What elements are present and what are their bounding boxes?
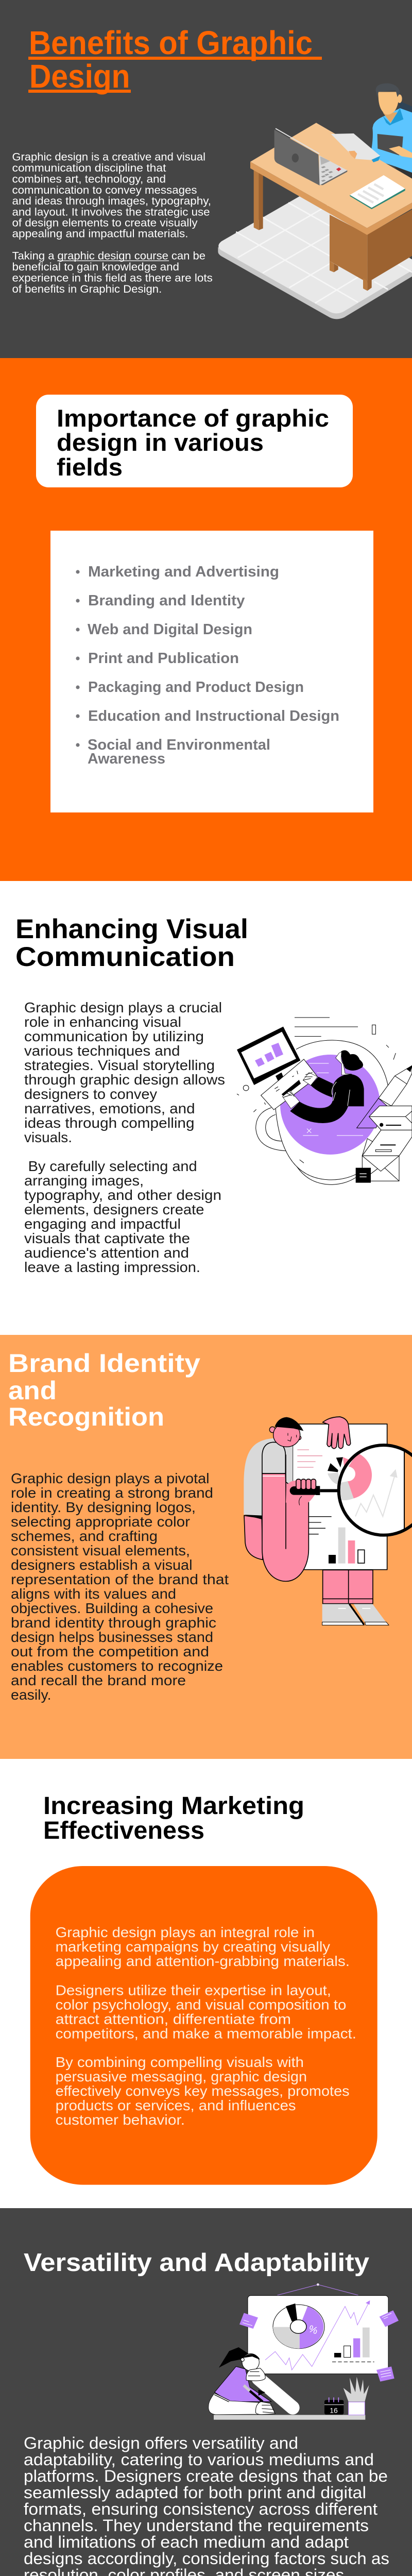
text block: intro definition: appealing and impactful materials.	[12, 228, 188, 240]
callout: marketing text card: persuasive messaging, graphic design	[56, 2069, 307, 2084]
text block: brand paragraph: aligns with its values and	[11, 1586, 176, 1602]
text block: brand paragraph: enables customers to recognize	[11, 1658, 223, 1674]
heading: Recognition	[8, 1402, 164, 1431]
text block: versatility paragraph one: seamlessly adapted for both print and digital	[24, 2483, 366, 2502]
text block: brand paragraph: representation of the brand that	[11, 1571, 229, 1587]
panel: versatility and adaptability	[0, 2208, 412, 2576]
panel: importance of graphic design	[0, 358, 412, 881]
list card: fields	[50, 531, 373, 812]
heading: Effectiveness	[43, 1817, 204, 1844]
text block: brand paragraph: designers establish a visual	[11, 1557, 193, 1573]
text block: brand paragraph: Graphic design plays a pivotal	[11, 1470, 210, 1486]
text block: brand paragraph: consistent visual elements,	[11, 1543, 190, 1558]
text block: intro definition: of design elements to create visually	[12, 217, 198, 229]
heading	[43, 1792, 304, 1844]
heading card: design in various	[57, 429, 264, 456]
text block: versatility paragraph one: adaptability, catering to various mediums and	[24, 2450, 374, 2469]
heading	[8, 1349, 200, 1431]
text block: course note: of benefits in Graphic Design.	[12, 283, 162, 295]
callout: marketing text card: competitors, and make a memorable impact.	[56, 2026, 356, 2042]
title	[28, 24, 322, 95]
icon: man with magnifying glass and report	[244, 1417, 412, 1625]
list card: fields: Marketing and Advertising	[88, 564, 279, 580]
text block: brand paragraph: objectives. Building a cohesive	[11, 1600, 213, 1616]
text block: visual paragraph two: engaging and impactful	[24, 1216, 181, 1232]
text block: visual paragraph one: ideas through compelling	[24, 1115, 195, 1131]
list card: fields: Web and Digital Design	[88, 621, 252, 638]
text block: visual paragraph two	[24, 1158, 221, 1275]
heading: Brand Identity	[8, 1349, 200, 1378]
panel: introduction	[0, 0, 412, 358]
heading card	[36, 395, 353, 487]
callout: marketing text card: products or services, and influences	[56, 2097, 296, 2113]
list card: fields: Print and Publication	[88, 650, 239, 667]
callout: marketing text card: color psychology, and visual composition to	[56, 1997, 346, 2013]
list card: fields: Education and Instructional Design	[88, 708, 339, 724]
text block: versatility paragraph one: formats, ensuring consistency across different	[24, 2500, 377, 2518]
text block: visual paragraph one	[24, 999, 225, 1145]
text block: brand paragraph: design helps businesses stand	[11, 1629, 213, 1645]
text block: visual paragraph one: communication by utilizing	[24, 1028, 204, 1044]
text block: intro definition: and layout. It involves the strategic use	[12, 206, 210, 218]
text block: brand paragraph	[11, 1470, 229, 1703]
panel: increasing marketing effectiveness	[0, 1759, 412, 2208]
list card: fields: Awareness	[88, 751, 165, 767]
list card: fields: Packaging and Product Design	[88, 679, 304, 696]
text block: versatility paragraph one: designs accordingly, considering factors such as	[24, 2549, 389, 2568]
text block: intro definition: communication to convey messages	[12, 184, 197, 196]
text block: visual paragraph two: By carefully selecting and	[28, 1158, 197, 1174]
title: Design	[29, 58, 130, 95]
text block: visual paragraph two: arranging images,	[24, 1173, 144, 1189]
text block: visual paragraph two: leave a lasting impression.	[24, 1259, 200, 1275]
text block: versatility paragraph one	[24, 2434, 389, 2576]
text block: versatility paragraph one: platforms. Designers create designs that can be	[24, 2467, 388, 2485]
text block: visual paragraph one: role in enhancing visual	[24, 1014, 181, 1030]
text block: brand paragraph: brand identity through graphic	[11, 1615, 216, 1631]
text block: brand paragraph: role in creating a strong brand	[11, 1485, 213, 1501]
heading: Increasing Marketing	[43, 1792, 304, 1820]
text block: visual paragraph one: Graphic design plays a crucial	[24, 999, 222, 1015]
text block: visual paragraph one: visuals.	[24, 1129, 72, 1145]
heading: Communication	[15, 942, 235, 972]
text block: brand paragraph: selecting appropriate color	[11, 1514, 190, 1530]
text block: brand paragraph: and recall the brand more	[11, 1672, 186, 1688]
text block: visual paragraph one: strategies. Visual storytelling	[24, 1057, 215, 1073]
text block: course note: Taking a graphic design course can be	[12, 250, 205, 262]
text block: brand paragraph: identity. By designing logos,	[11, 1499, 196, 1515]
text block: brand paragraph: easily.	[11, 1687, 52, 1703]
text block: intro definition: communication discipline that	[12, 162, 166, 174]
callout: marketing text card: marketing campaigns by creating visually	[56, 1939, 330, 1955]
text block: brand paragraph: schemes, and crafting	[11, 1528, 158, 1544]
text block: visual paragraph one: narratives, emotions, and	[24, 1100, 195, 1116]
callout: marketing text card: By combining compelling visuals with	[56, 2054, 304, 2070]
text block: visual paragraph two: typography, and other design	[24, 1187, 221, 1203]
callout: marketing text card: Designers utilize their expertise in layout,	[56, 1982, 331, 1998]
text block: visual paragraph two: elements, designers create	[24, 1201, 204, 1217]
text block: visual paragraph one: various techniques and	[24, 1043, 180, 1059]
panel: enhancing visual communication	[0, 881, 412, 1335]
text block: versatility paragraph one: channels. They understand the requirements	[24, 2516, 369, 2535]
callout: marketing text card: appealing and attention-grabbing materials.	[56, 1953, 350, 1969]
text block: intro definition: Graphic design is a creative and visual	[12, 151, 205, 163]
callout: marketing text card: Graphic design plays an integral role in	[56, 1924, 315, 1940]
heading card: fields	[57, 453, 123, 481]
title: Benefits of Graphic	[29, 24, 313, 61]
text block: brand paragraph: out from the competition and	[11, 1643, 209, 1659]
panel: brand identity and recognition	[0, 1335, 412, 1759]
heading: Enhancing Visual	[15, 914, 248, 944]
text block: intro definition	[12, 151, 211, 240]
heading: Versatility and Adaptability	[24, 2249, 369, 2277]
text block: visual paragraph one: designers to convey	[24, 1086, 157, 1102]
text block: visual paragraph two: audience's attention and	[24, 1245, 189, 1261]
heading	[15, 914, 248, 972]
text block: intro definition: combines art, technology, and	[12, 173, 166, 185]
text block: visual paragraph two: visuals that captivate the	[24, 1230, 190, 1246]
icon: woman studying analytics board	[209, 2283, 399, 2420]
callout: marketing text card	[30, 1866, 377, 2185]
text block: intro definition: and ideas through images, typography,	[12, 195, 211, 207]
text block: versatility paragraph one: Graphic design offers versatility and	[24, 2434, 298, 2452]
text block: course note	[12, 250, 213, 295]
text block: visual paragraph one: through graphic design allows	[24, 1072, 225, 1088]
callout: marketing text card: attract attention, differentiate from	[56, 2011, 291, 2027]
callout: marketing text card: effectively conveys key messages, promotes	[56, 2083, 350, 2099]
icon: woman working in a coffee cup	[237, 1018, 412, 1184]
heading card: Importance of graphic	[57, 404, 329, 432]
list card: fields: Branding and Identity	[88, 592, 245, 609]
icon: woman studying analytics board: %	[307, 2324, 319, 2337]
text block: versatility paragraph one: and limitations of each medium and adapt	[24, 2533, 349, 2551]
heading: and	[8, 1376, 57, 1405]
icon: designer at isometric desk	[218, 83, 412, 319]
icon: woman studying analytics board: 16	[330, 2406, 338, 2414]
text block: course note: experience in this field as there are lots	[12, 272, 213, 284]
list card: fields: Social and Environmental	[88, 737, 270, 753]
callout: marketing text card: customer behavior.	[56, 2112, 185, 2128]
text block: course note: beneficial to gain knowledge and	[12, 261, 179, 273]
